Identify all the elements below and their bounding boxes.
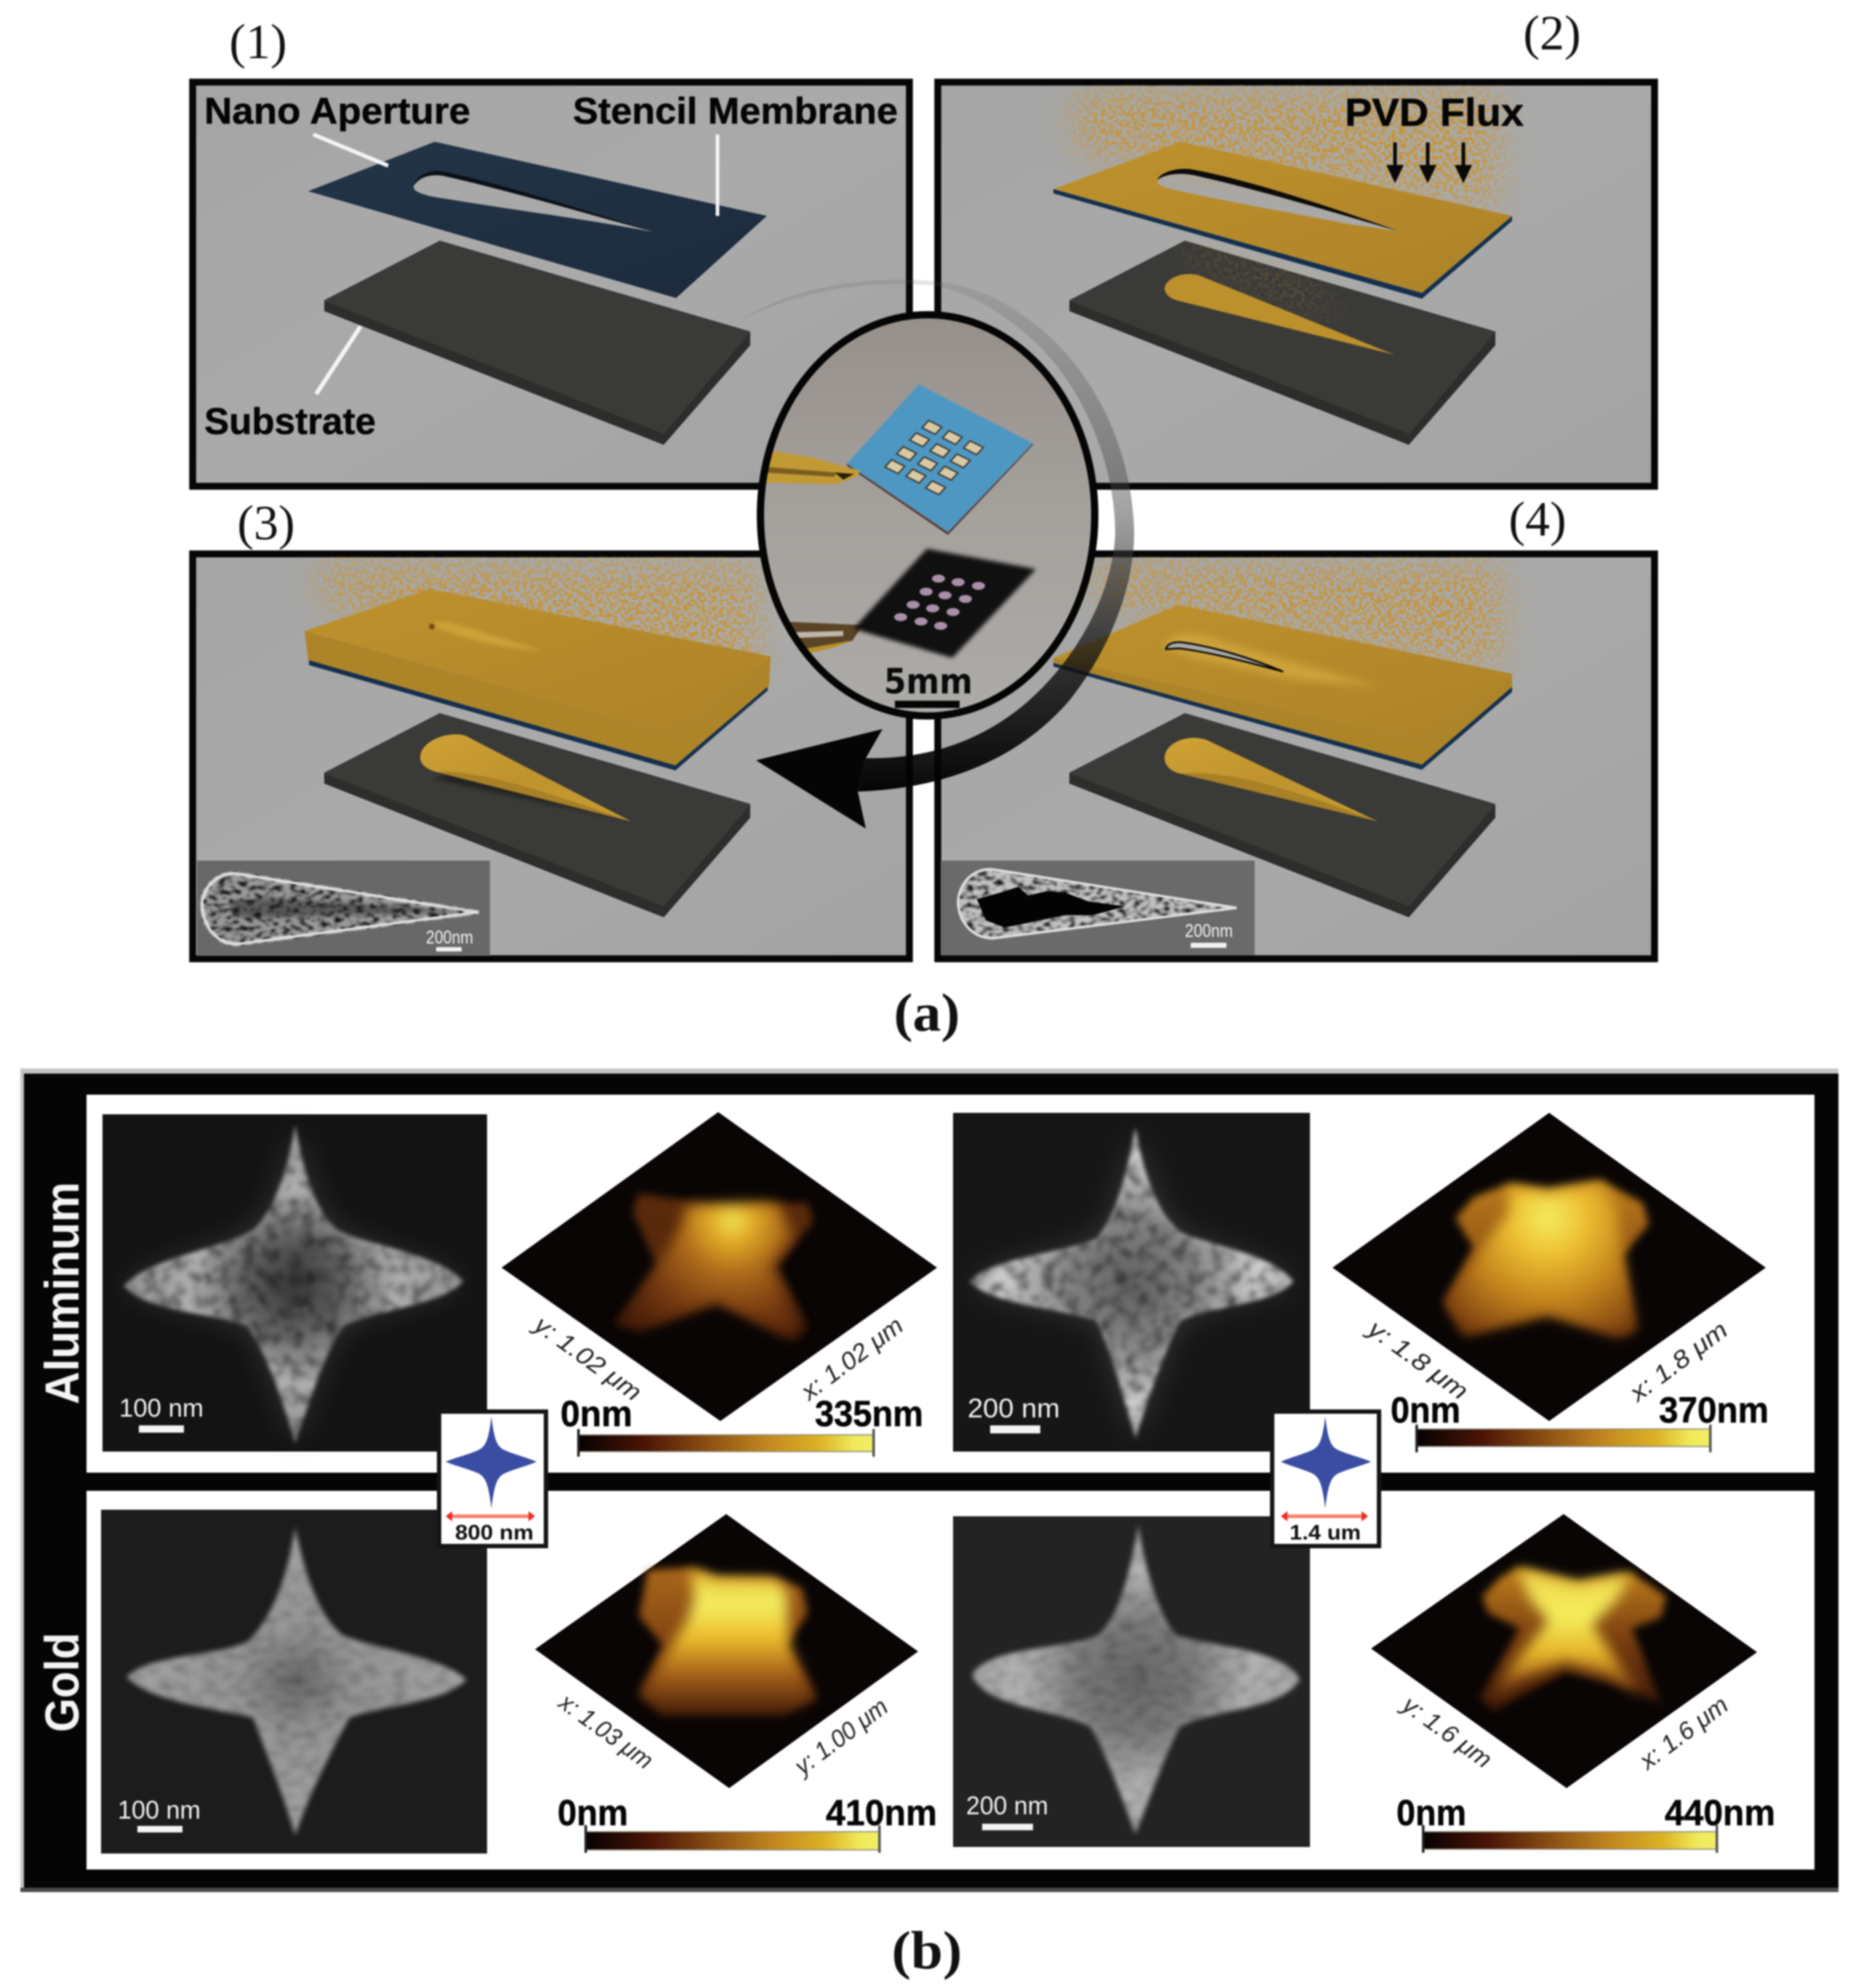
step label 1: (1) [229, 14, 287, 69]
AFM height column [622, 1203, 800, 1337]
AFM map gold 1.4 um [1371, 1514, 1775, 1853]
flux arrows [1386, 142, 1472, 183]
colorbar [1422, 1825, 1719, 1853]
red width arrow [1281, 1511, 1368, 1521]
panel 2: PVD flux [938, 82, 1655, 486]
inset background [941, 861, 1255, 955]
chip photo contents [763, 385, 1036, 658]
lower tweezers [781, 621, 863, 654]
scale bar [137, 1826, 182, 1832]
gold cone shadow [434, 773, 631, 821]
substrate block [324, 713, 750, 917]
blue stencil chip [847, 385, 1033, 532]
caption (b): (b) [891, 1921, 962, 1981]
AFM dim outer lobes [1444, 1180, 1649, 1337]
width label: 800 nm [455, 1521, 534, 1545]
callout box [439, 1412, 546, 1546]
panel 3: thick deposition, closed aperture [193, 554, 909, 959]
AFM height column [1447, 1183, 1636, 1337]
gold 800 nm SEM [101, 1510, 487, 1854]
SEM background [103, 1114, 487, 1452]
label nano aperture: Nano Aperture [204, 90, 470, 132]
AFM dim outer lobes [615, 1194, 813, 1341]
sealed aperture dimple [430, 622, 542, 651]
AFM bright X [1489, 1569, 1647, 1707]
label PVD flux: PVD Flux [1345, 91, 1524, 134]
axis label y: y: 1.8 μm [1362, 1313, 1473, 1406]
label substrate: Substrate [204, 401, 376, 442]
colorbar low label: 0nm [558, 1792, 628, 1833]
scale label: 100 nm [119, 1394, 204, 1422]
gold cone [420, 734, 631, 821]
black frame [24, 1074, 1838, 1888]
gold 1.4 um SEM [953, 1516, 1310, 1847]
SEM inset [941, 861, 1255, 955]
AFM base [535, 1514, 918, 1788]
inset scale bar [1191, 943, 1226, 948]
colorbar low label: 0nm [560, 1393, 632, 1434]
colorbar [1415, 1425, 1711, 1452]
pointer line nano aperture [313, 134, 388, 166]
axis label y: y: 1.00 μm [789, 1693, 893, 1782]
dark central seam [229, 898, 473, 917]
aperture top shadow [414, 171, 654, 232]
SEM halo [970, 1129, 1293, 1436]
gold particles [1098, 563, 1501, 669]
gold coated membrane [1053, 142, 1512, 293]
scale bar [982, 1824, 1033, 1830]
gold block sides [1053, 658, 1512, 765]
row label gold: Gold [35, 1633, 89, 1732]
step label 4: (4) [1508, 491, 1567, 547]
AFM base [1371, 1514, 1757, 1788]
teardrop rim [958, 869, 1237, 938]
axis label y: y: 1.6 μm [1396, 1690, 1497, 1774]
SEM background [953, 1516, 1310, 1847]
step label 2: (2) [1523, 5, 1581, 60]
outer grey edge [20, 1069, 1838, 1892]
star particle [126, 1526, 467, 1835]
AFM base [502, 1112, 937, 1421]
gold particles [1076, 91, 1498, 207]
upper tweezers [763, 449, 861, 484]
colorbar [584, 1825, 881, 1853]
panel 2 frame [938, 82, 1655, 486]
SEM inset [197, 861, 490, 956]
teardrop rim [202, 874, 478, 944]
gold block top [1053, 605, 1512, 741]
partly closed aperture [1166, 642, 1283, 672]
inset scale label: 200nm [426, 927, 473, 948]
substrate block [1069, 241, 1495, 445]
scale label 5mm: 5mm [884, 661, 973, 702]
gold particles [320, 563, 756, 680]
star particle [970, 1129, 1293, 1436]
inset background [197, 861, 490, 956]
callout 800 nm star design [439, 1412, 546, 1546]
aluminum row panel [87, 1095, 1814, 1473]
blue star icon [446, 1417, 536, 1508]
row label aluminum: Aluminum [35, 1182, 89, 1404]
blue star icon [1281, 1417, 1371, 1508]
AFM base [1333, 1113, 1766, 1421]
AFM dim outer lobes [1479, 1567, 1666, 1711]
AFM map aluminum 800 nm [502, 1112, 937, 1457]
arrow shaft [741, 280, 1134, 792]
red width arrow [446, 1511, 535, 1521]
panel 3 frame [193, 554, 909, 959]
axis label x: x: 1.8 μm [1623, 1316, 1733, 1408]
aluminum 1.4 um SEM [953, 1113, 1310, 1452]
SEM halo [124, 1124, 464, 1444]
label stencil membrane: Stencil Membrane [573, 90, 898, 132]
black chip apertures [894, 574, 985, 629]
callout box [1272, 1412, 1379, 1546]
substrate block [1069, 713, 1495, 917]
AFM height column [641, 1570, 814, 1712]
aluminum 800 nm SEM [103, 1114, 487, 1452]
axis label x: x: 1.03 μm [552, 1688, 658, 1775]
scale bar [990, 1425, 1040, 1433]
colorbar [577, 1429, 875, 1457]
gold particles on substrate [1186, 240, 1333, 321]
inset teardrop [958, 869, 1237, 938]
blue membrane edge [309, 659, 768, 770]
chip apertures [885, 420, 983, 494]
substrate block [324, 241, 750, 445]
colorbar low label: 0nm [1396, 1792, 1466, 1833]
inset scale bar [436, 947, 462, 951]
axis label x: x: 1.02 μm [795, 1311, 909, 1407]
panel 1 frame [193, 82, 909, 486]
panel 4 frame [938, 554, 1655, 959]
pointer line substrate [316, 326, 361, 394]
inset teardrop [202, 874, 478, 944]
AFM dim outer lobes [639, 1567, 816, 1714]
bottom frame edge [20, 1888, 1838, 1892]
step label 3: (3) [237, 495, 295, 550]
axis label y: y: 1.02 μm [528, 1310, 646, 1407]
arrow head [756, 729, 883, 829]
pointer line stencil membrane [715, 134, 720, 216]
gold block top [305, 589, 771, 736]
star particle [124, 1124, 464, 1444]
colorbar low label: 0nm [1391, 1390, 1460, 1430]
star particle [972, 1524, 1300, 1834]
scale bar 5mm [895, 701, 960, 708]
blue chip edge [847, 443, 1033, 535]
AFM map aluminum 1.4 um [1333, 1113, 1769, 1452]
gold row panel [87, 1491, 1814, 1870]
gold cone [1165, 738, 1378, 821]
scale label: 200 nm [968, 1393, 1060, 1423]
AFM map gold 800 nm [535, 1514, 937, 1853]
inset scale label: 200nm [1185, 921, 1233, 941]
scale label: 200 nm [966, 1792, 1048, 1820]
colorbar high label: 370nm [1659, 1390, 1769, 1430]
colorbar high label: 440nm [1665, 1792, 1775, 1833]
panel 1: nano aperture, stencil membrane and substrate [193, 82, 909, 486]
callout 1.4 um star design [1272, 1412, 1379, 1546]
width label: 1.4 um [1290, 1521, 1361, 1545]
caption (a): (a) [894, 983, 960, 1043]
blue membrane edge [1053, 661, 1512, 770]
panel 4: partial closure [938, 554, 1655, 959]
oval photo [760, 315, 1095, 716]
gold teardrop deposit [1165, 274, 1394, 355]
black chip [853, 549, 1036, 658]
axis label x: x: 1.6 μm [1633, 1691, 1734, 1776]
aperture pinpoint [429, 624, 435, 629]
cone under face [436, 772, 631, 821]
gold block side faces [305, 631, 771, 765]
panel b: measurements of stars [20, 1069, 1838, 1892]
SEM background [101, 1510, 487, 1854]
membrane blue under-edge [1053, 189, 1512, 299]
aperture raised rim [1163, 634, 1381, 687]
stencil membrane with aperture [308, 142, 767, 298]
SEM background [953, 1113, 1310, 1452]
central photo of stencil chips [760, 315, 1095, 716]
cone under face [1179, 773, 1378, 821]
curved process arrow [741, 280, 1134, 829]
scale label: 100 nm [118, 1796, 201, 1824]
scale bar [139, 1425, 184, 1433]
oval border [760, 315, 1095, 716]
colorbar high label: 410nm [826, 1792, 937, 1833]
aperture dark edge [1157, 169, 1399, 231]
colorbar high label: 335nm [815, 1393, 923, 1434]
black open hole [977, 887, 1125, 927]
